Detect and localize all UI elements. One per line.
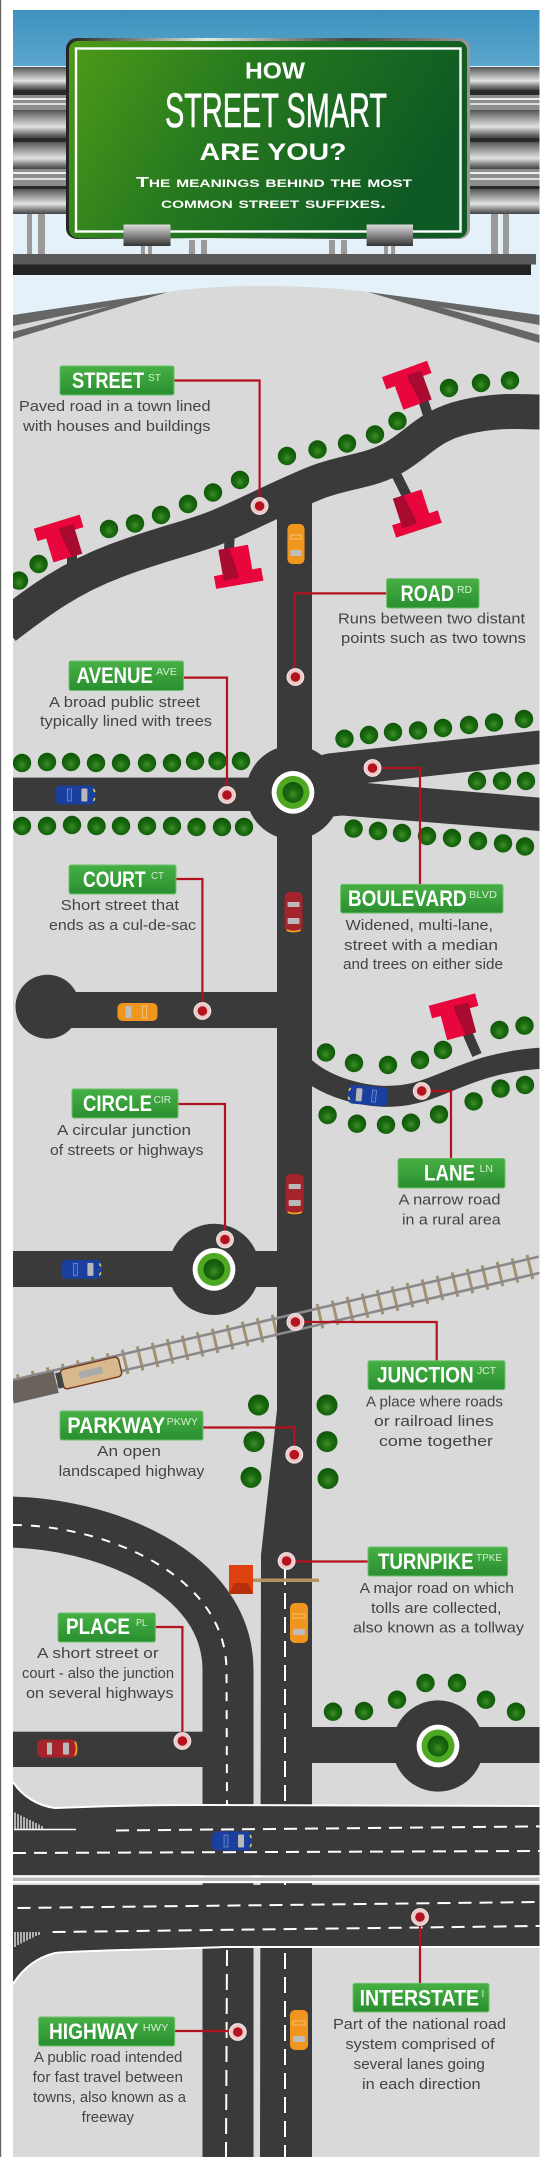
sign title	[136, 58, 412, 212]
lane dashes on curve and verticals	[13, 1525, 285, 2157]
trees: avenue	[13, 752, 253, 836]
sign title: common street suffixes.	[161, 195, 386, 212]
text: court: Short street that	[61, 898, 179, 914]
tag: lane: LN	[480, 1164, 493, 1175]
text: highway: A public road intended	[34, 2050, 182, 2066]
trees: right roundabout	[324, 1674, 525, 1721]
tag: place: PL	[136, 1618, 147, 1629]
text: junction: come together	[379, 1434, 493, 1450]
tag: boulevard: BOULEVARD	[348, 886, 467, 911]
road: place curve	[5, 1522, 228, 2157]
tag: parkway	[60, 1411, 203, 1440]
sky background	[13, 10, 540, 326]
text: parkway: landscaped highway	[59, 1464, 205, 1480]
toll booth	[229, 1565, 319, 1594]
overhead gantry rails	[13, 67, 540, 275]
text: avenue: A broad public street	[49, 695, 200, 711]
text: lane: in a rural area	[402, 1213, 502, 1229]
trees: lane	[317, 1016, 534, 1134]
text: parkway: An open	[97, 1444, 161, 1460]
tag: court	[69, 865, 176, 894]
text: interstate: Part of the national road	[333, 2017, 506, 2033]
text: highway: freeway	[82, 2110, 135, 2126]
text: avenue	[40, 695, 212, 730]
text: turnpike	[353, 1581, 525, 1636]
tag: place	[58, 1613, 155, 1642]
interstate	[13, 1782, 540, 1984]
text: lane: A narrow road	[398, 1193, 500, 1209]
trees: parkway	[240, 1394, 338, 1489]
tag: circle: CIR	[154, 1095, 171, 1106]
tag: road: RD	[457, 585, 472, 596]
text: highway: towns, also known as a	[33, 2090, 187, 2106]
road: boulevard	[300, 730, 540, 831]
text: place: on several highways	[26, 1686, 174, 1702]
text: court	[49, 898, 196, 934]
text: highway	[33, 2050, 187, 2126]
tag: parkway: PKWY	[167, 1417, 198, 1428]
sign clamps	[124, 224, 413, 246]
trees: street	[10, 371, 519, 590]
text: junction: or railroad lines	[374, 1414, 494, 1430]
sign title: ARE YOU?	[200, 139, 346, 166]
tag: avenue: AVENUE	[76, 663, 153, 688]
text: place: court - also the junction	[22, 1666, 174, 1682]
text: turnpike: also known as a tollway	[353, 1620, 525, 1636]
text: circle	[50, 1123, 204, 1159]
text: boulevard	[343, 918, 503, 973]
tag: highway	[39, 2017, 175, 2046]
text: place	[22, 1646, 174, 1702]
road: street	[5, 411, 545, 627]
text: turnpike: tolls are collected,	[371, 1601, 502, 1617]
railroad ties	[0, 1264, 544, 1394]
tag: road: ROAD	[401, 581, 454, 606]
median lines	[13, 1875, 540, 1883]
text: interstate: system comprised of	[346, 2037, 496, 2053]
text: lane	[398, 1193, 502, 1229]
perspective road rails	[13, 292, 540, 343]
tag: avenue	[69, 661, 184, 690]
road: avenue	[13, 778, 273, 811]
tag: place: PLACE	[66, 1614, 130, 1639]
tag: turnpike: TURNPIKE	[378, 1549, 474, 1574]
upper carriageway	[13, 1782, 540, 1875]
sign title: STREET SMART	[165, 85, 387, 138]
tag: lane	[398, 1158, 505, 1188]
tag: interstate: I	[482, 1989, 484, 2000]
road: vertical main	[260, 490, 312, 2157]
tag: street: ST	[148, 373, 161, 384]
roundabout: avenue	[248, 748, 334, 836]
tag: boulevard: BLVD	[469, 890, 497, 901]
text: interstate: in each direction	[362, 2077, 481, 2093]
tag: circle: CIRCLE	[83, 1091, 152, 1116]
text: junction: A place where roads	[366, 1394, 503, 1410]
text: street	[19, 399, 210, 435]
tag: junction: JCT	[477, 1366, 496, 1377]
tag: court: CT	[151, 871, 164, 882]
tag: parkway: PARKWAY	[67, 1413, 165, 1438]
train	[9, 1356, 123, 1403]
tag: road	[387, 579, 479, 608]
sign title: HOW	[245, 58, 305, 84]
road stubs to houses	[72, 400, 477, 1055]
text: boulevard: and trees on either side	[343, 957, 503, 973]
road network	[5, 411, 545, 2157]
tag: interstate: INTERSTATE	[360, 1986, 479, 2010]
tag: highway: HIGHWAY	[49, 2019, 139, 2044]
text: street: with houses and buildings	[22, 419, 210, 435]
road: right roundabout	[312, 1700, 540, 1792]
tag: junction: JUNCTION	[377, 1362, 474, 1387]
text: avenue: typically lined with trees	[40, 714, 212, 730]
text: circle: of streets or highways	[50, 1143, 204, 1159]
leader dots	[174, 498, 430, 2040]
text: place: A short street or	[37, 1646, 159, 1662]
text: circle: A circular junction	[57, 1123, 191, 1139]
text: road: points such as two towns	[341, 631, 526, 647]
tag: street	[60, 366, 174, 395]
road: lane	[305, 1058, 545, 1096]
roundabout centers	[193, 771, 459, 1767]
text: junction	[366, 1394, 503, 1450]
tag: highway: HWY	[143, 2023, 169, 2034]
text: road	[338, 612, 526, 647]
trees: boulevard	[335, 710, 535, 856]
road: court cul-de-sac	[16, 975, 279, 1039]
lane dashes	[13, 1826, 540, 1932]
text: road: Runs between two distant	[338, 612, 525, 628]
houses	[34, 361, 485, 1042]
railroad rails	[1, 1257, 543, 1398]
text: parkway	[59, 1444, 205, 1480]
text: highway: for fast travel between	[33, 2070, 183, 2086]
tag: avenue: AVE	[156, 667, 177, 678]
text: court: ends as a cul-de-sac	[49, 918, 196, 934]
tag: turnpike: TPKE	[476, 1553, 502, 1564]
text: boulevard: Widened, multi-lane,	[346, 918, 493, 934]
text: interstate	[333, 2017, 506, 2093]
sign title: The meanings behind the most	[136, 174, 412, 191]
text: turnpike: A major road on which	[360, 1581, 514, 1597]
text: interstate: several lanes going	[354, 2057, 485, 2073]
highway sign	[66, 38, 470, 246]
tag: turnpike	[368, 1547, 508, 1576]
road: place branch	[13, 1732, 203, 1767]
cars	[37, 524, 389, 2050]
tag: circle	[72, 1089, 178, 1118]
text: boulevard: street with a median	[344, 938, 498, 954]
tag: lane: LANE	[424, 1160, 475, 1186]
lower carriageway	[13, 1885, 540, 1984]
road: circle	[13, 1224, 278, 1315]
hatched gores	[14, 1812, 76, 1947]
tag: court: COURT	[83, 867, 146, 892]
leader lines	[155, 380, 451, 2031]
text: street: Paved road in a town lined	[19, 399, 210, 415]
tag: street: STREET	[72, 368, 144, 393]
